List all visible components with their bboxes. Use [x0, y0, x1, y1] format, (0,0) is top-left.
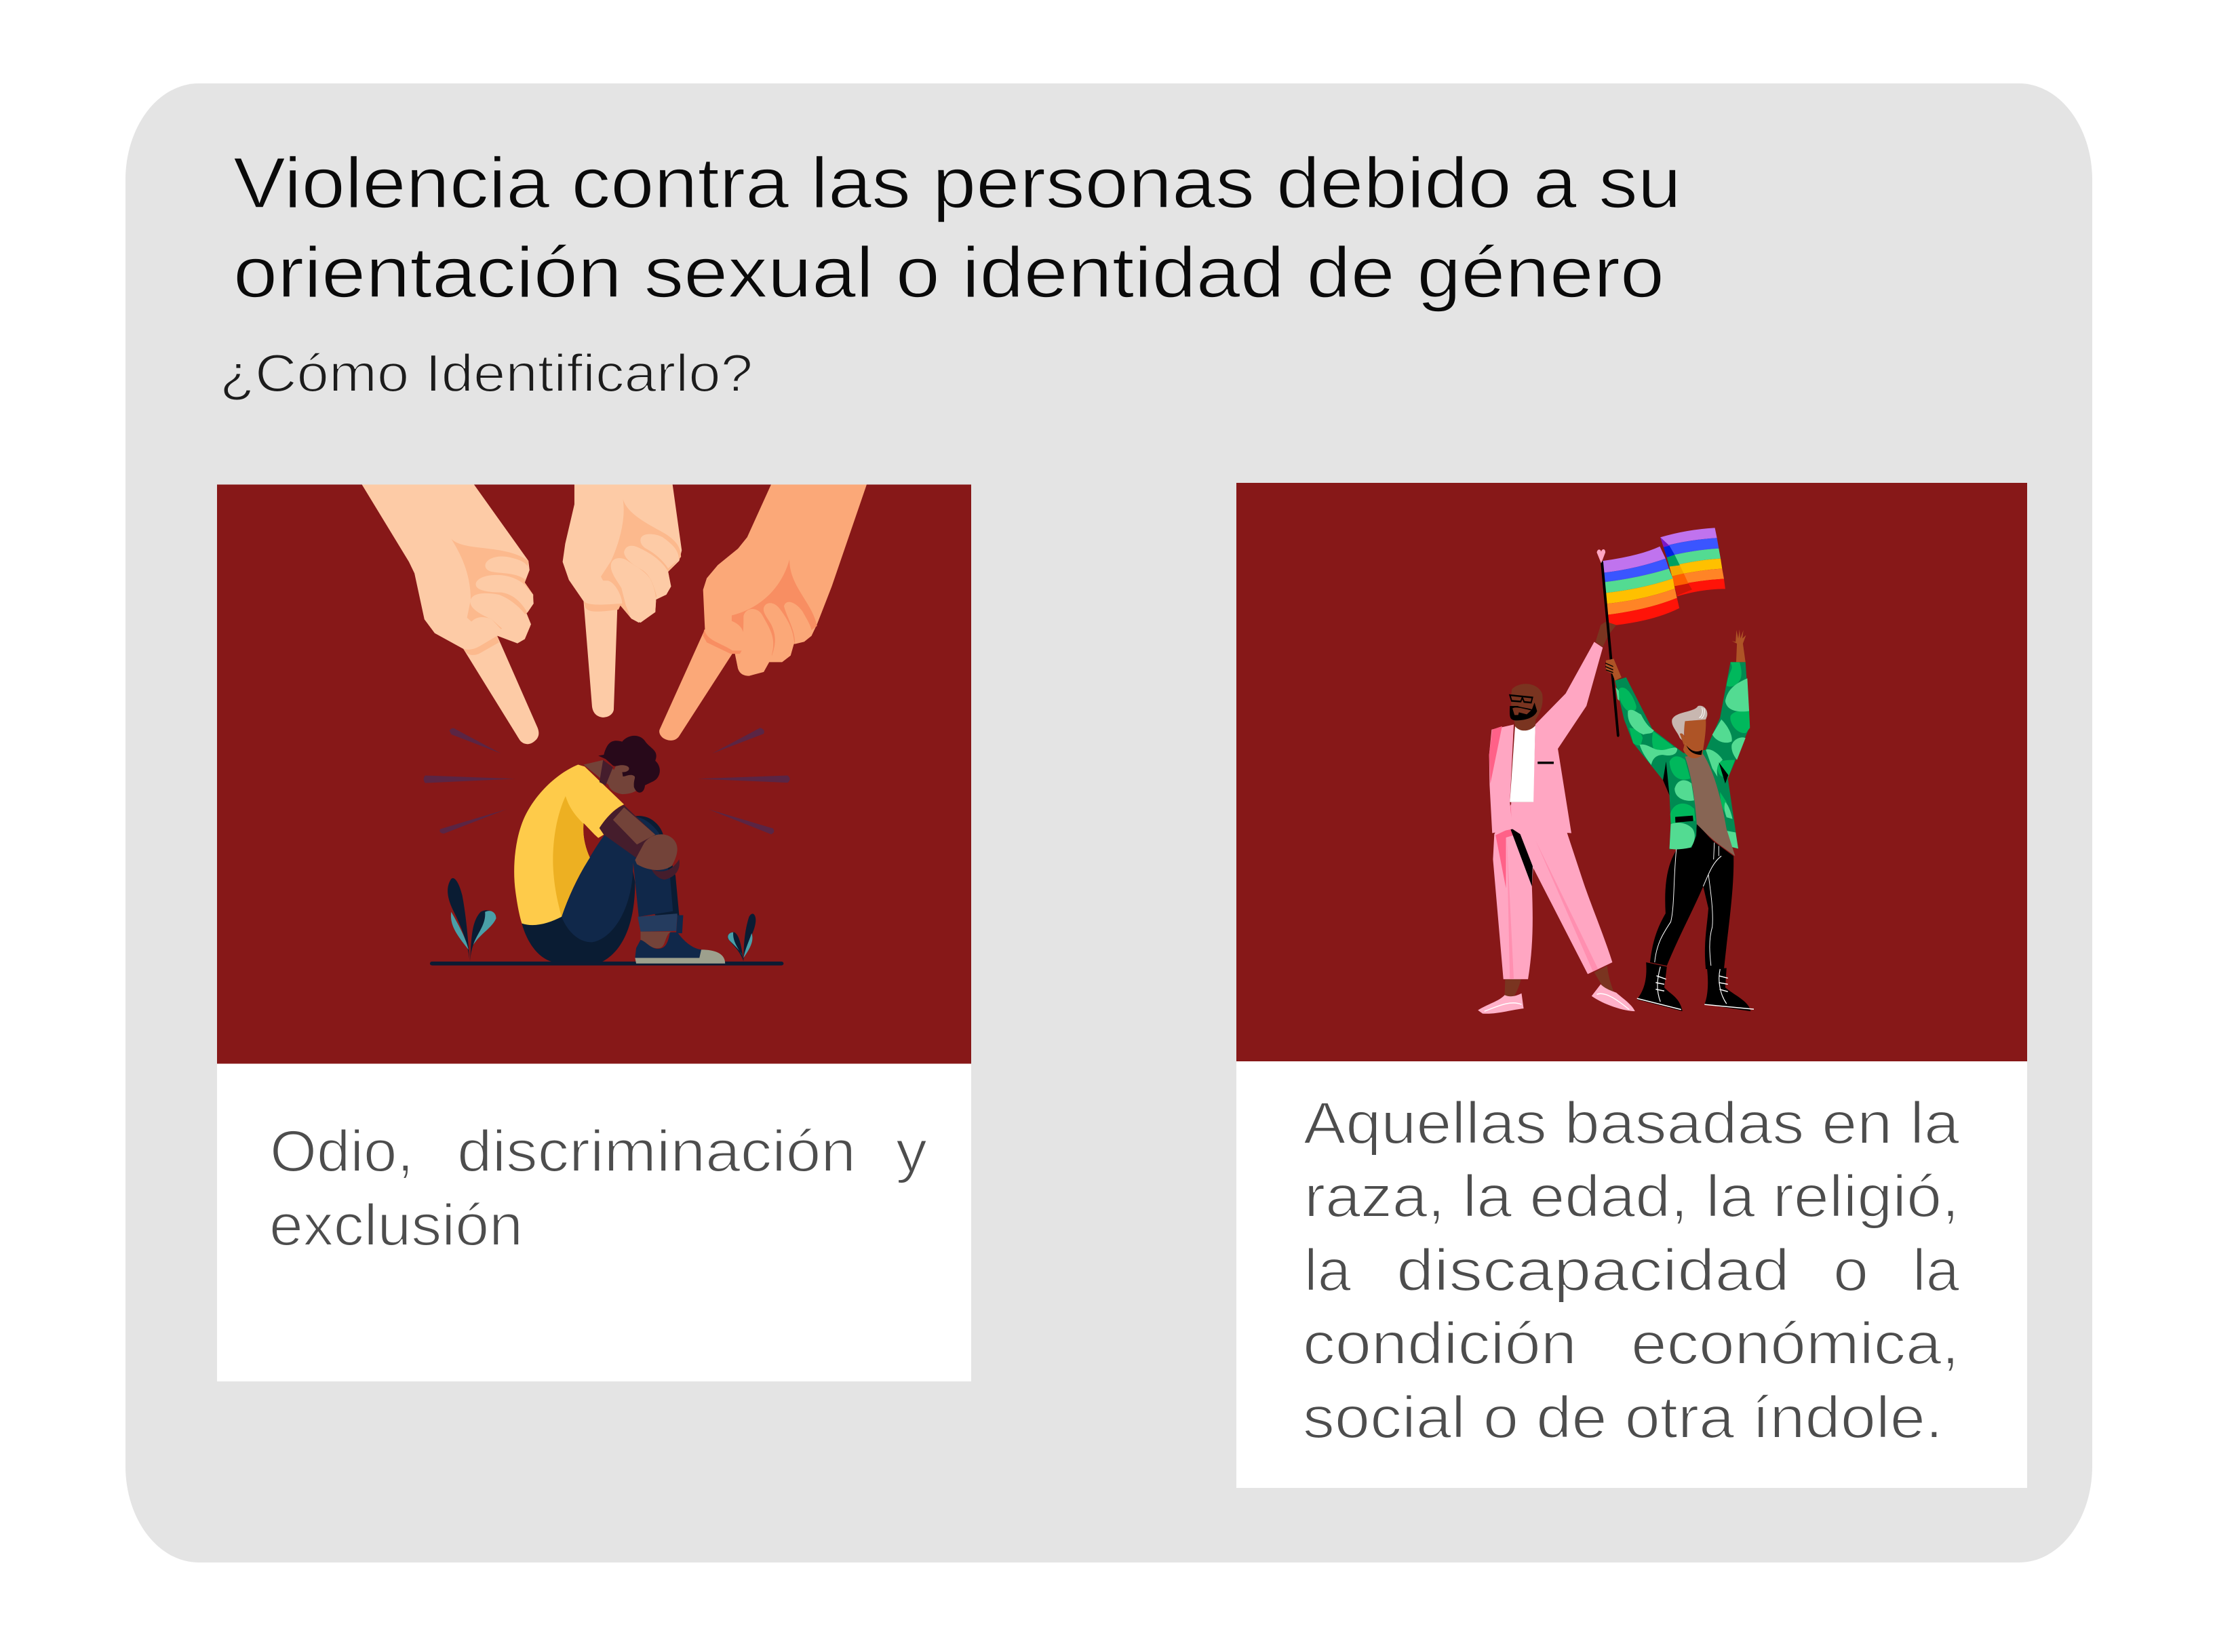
icon: sad seated person [514, 736, 725, 964]
icon: right pointing hand [659, 485, 867, 741]
right card text: raza, la edad, la religió, [1304, 1164, 1959, 1230]
icon: left plant [448, 878, 496, 961]
left card text [269, 1119, 927, 1258]
illustration: two men waving a rainbow flag [1478, 528, 1754, 1014]
right card text: la [1304, 1238, 1352, 1303]
icon: left pointing hand [362, 485, 538, 744]
right card white body [1236, 1058, 2027, 1488]
left card text: y [896, 1119, 927, 1184]
right card text: social o de otra índole. [1303, 1385, 1943, 1451]
right card text: o [1833, 1238, 1868, 1303]
icon: flag pole [1596, 549, 1618, 735]
right card text: Aquellas basadas en la [1303, 1090, 1960, 1156]
right card text: la [1913, 1238, 1960, 1303]
background panel [125, 83, 2092, 1562]
left card illustration background [217, 484, 971, 1063]
icon: man in pink suit [1478, 622, 1635, 1014]
right card illustration background [1236, 483, 2027, 1061]
panel: right card [1236, 483, 2027, 1488]
right card text: discapacidad [1396, 1238, 1790, 1303]
left card text: discriminación [457, 1119, 856, 1184]
right card text: condición [1303, 1311, 1577, 1377]
subtitle: ¿Cómo Identificarlo? [220, 343, 753, 403]
icon: man in green jacket [1605, 629, 1754, 1011]
illustration: three hands pointing at a sad person [362, 485, 867, 966]
icon: centre pointing hand [563, 485, 682, 717]
title: Violencia contra las personas debido a su [233, 143, 1681, 223]
icon: emphasis rays [424, 728, 790, 834]
title: orientación sexual o identidad de género [233, 233, 1664, 313]
left card text: Odio, [270, 1119, 414, 1184]
icon: right plant [728, 913, 756, 961]
left card white body [217, 1058, 971, 1381]
left card text: exclusión [269, 1193, 523, 1258]
panel: left card [217, 484, 971, 1381]
title [233, 143, 1681, 313]
icon: rainbow flag [1603, 528, 1725, 626]
ground line [430, 962, 783, 966]
right card text: económica, [1631, 1311, 1959, 1377]
right card text [1303, 1090, 1960, 1451]
